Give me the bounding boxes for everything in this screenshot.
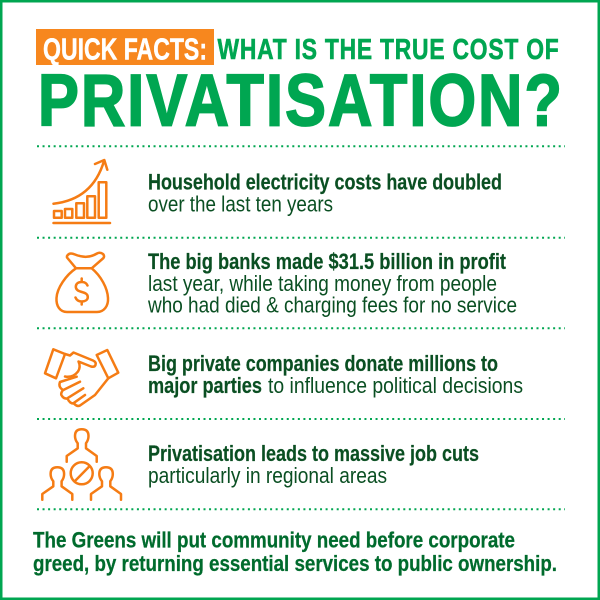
- fact 1 text: over the last ten years: [148, 192, 333, 216]
- fact 3 text: [148, 351, 523, 398]
- fact 2 text: who had died & charging fees for no service: [147, 292, 517, 318]
- icon: rising bar chart: [54, 160, 110, 223]
- icon: handshake: [45, 349, 118, 406]
- fact 4 text: Privatisation leads to massive job cuts: [148, 441, 479, 466]
- fact 2: bank profits: [56, 249, 517, 318]
- fact 1 text: Household electricity costs have doubled: [148, 170, 502, 194]
- icon: money bag: [56, 253, 108, 312]
- closing statement: The Greens will put community need before corporate: [33, 528, 515, 552]
- fact 3 text: major parties: [148, 373, 262, 398]
- fact 1 text: [148, 170, 502, 216]
- fact 1: electricity costs: [54, 160, 502, 223]
- fact 4 text: [148, 441, 479, 488]
- closing statement: [33, 528, 557, 576]
- quick facts badge: QUICK FACTS:: [43, 32, 207, 66]
- fact 3 text: to influence political decisions: [268, 373, 523, 398]
- fact 4: job cuts: [42, 429, 479, 500]
- fact 2 text: last year, while taking money from people: [148, 271, 497, 296]
- fact 2 text: [147, 249, 517, 318]
- fact 3 text: Big private companies donate millions to: [148, 351, 498, 376]
- fact 4 text: particularly in regional areas: [148, 463, 387, 488]
- title: [36, 29, 564, 142]
- icon: people with prohibition sign: [42, 429, 121, 500]
- fact 2 text: The big banks made $31.5 billion in profit: [148, 249, 507, 274]
- fact 3: political donations: [45, 349, 523, 406]
